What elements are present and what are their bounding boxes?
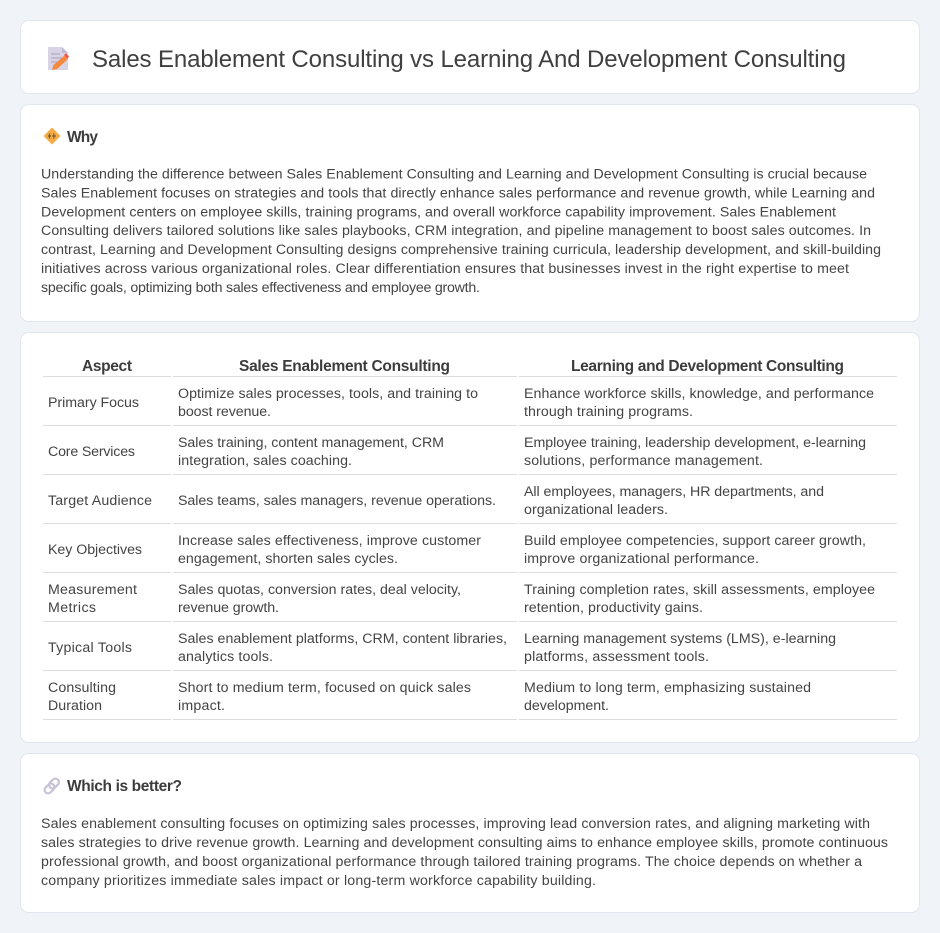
row: typical tools: Learning management systems (LMS), e-learning — [524, 631, 836, 647]
text block: which is better paragraph: company prioritizes immediate sales impact or long-term workforce capability building. — [41, 873, 596, 889]
icon: document with pencil — [48, 47, 69, 70]
heading: why: Why — [67, 129, 98, 146]
row: key objectives: Build employee competencies, support career growth, — [524, 533, 866, 549]
row: measurement metrics: retention, productivity gains. — [524, 600, 703, 616]
row: typical tools: platforms, assessment tools. — [524, 649, 709, 665]
row: core services: integration, sales coaching. — [178, 453, 352, 469]
text block: why paragraph: Understanding the difference between Sales Enablement Consulting and Learning and Development Consulting is crucial because — [41, 166, 867, 182]
row: measurement metrics: revenue growth. — [178, 600, 279, 616]
row: key objectives: engagement, shorten sales cycles. — [178, 551, 398, 567]
panel: which is better — [20, 754, 920, 912]
row: typical tools: Typical Tools — [48, 640, 132, 656]
row: primary focus: Primary Focus — [48, 395, 139, 411]
row: measurement metrics: Metrics — [48, 600, 96, 616]
row: target audience: Target Audience — [48, 493, 152, 509]
row: consulting duration — [48, 680, 811, 714]
row: primary focus — [48, 386, 874, 420]
row: consulting duration: development. — [524, 698, 609, 714]
row: typical tools — [48, 631, 836, 665]
title: Sales Enablement Consulting vs Learning And Development Consulting — [92, 46, 846, 73]
text block: which is better paragraph: professional growth, and boost organizational performance through tailored training programs. The choice depends on whether a — [41, 854, 862, 870]
icon: chain link — [43, 777, 60, 795]
text block: why paragraph: contrast, Learning and Development Consulting designs comprehensive training curricula, leadership development, and skill-building — [41, 242, 881, 258]
panel: why — [20, 104, 920, 322]
text block: which is better paragraph: sales strategies to drive revenue growth. Learning and development consulting aims to enhance employee skills, promote continuous — [41, 835, 888, 851]
row: target audience: All employees, managers, HR departments, and — [524, 484, 824, 500]
text block: which is better paragraph — [41, 816, 888, 889]
row: primary focus: Optimize sales processes, tools, and training to — [178, 386, 478, 402]
row: consulting duration: Short to medium term, focused on quick sales — [178, 680, 471, 696]
text block: why paragraph: Development centers on employee skills, training programs, and overall workforce capability improvement. Sales Enablement — [41, 204, 836, 220]
row: measurement metrics — [48, 582, 875, 616]
row: target audience: Sales teams, sales managers, revenue operations. — [178, 493, 496, 509]
table header row: Learning and Development Consulting — [571, 358, 844, 375]
text block: why paragraph — [41, 166, 881, 296]
panel: comparison table — [20, 332, 920, 742]
row: consulting duration: Consulting — [48, 680, 116, 696]
row: measurement metrics: Measurement — [48, 582, 137, 598]
row: key objectives: Increase sales effectiveness, improve customer — [178, 533, 481, 549]
panel: title header — [20, 20, 920, 94]
text block: why paragraph: Sales Enablement focuses on strategies and tools that directly enhance sales performance and revenue growth, while Learning and — [41, 185, 875, 201]
row: consulting duration: Duration — [48, 698, 102, 714]
row: typical tools: analytics tools. — [178, 649, 273, 665]
text block: why paragraph: specific goals, optimizing both sales effectiveness and employee growth. — [41, 280, 480, 296]
text block: why paragraph: initiatives across various organizational roles. Clear differentiation ensures that businesses invest in the right expertise to meet — [41, 261, 849, 277]
row: target audience — [48, 484, 824, 518]
icon: orange diamond — [44, 128, 60, 144]
row: key objectives — [48, 533, 866, 567]
table header row: Aspect — [82, 358, 132, 375]
row: key objectives: improve organizational performance. — [524, 551, 759, 567]
text block: why paragraph: Consulting delivers tailored solutions like sales playbooks, CRM integration, and pipeline management to boost sales outcomes. In — [41, 223, 871, 239]
row: core services: solutions, performance management. — [524, 453, 763, 469]
row: key objectives: Key Objectives — [48, 542, 142, 558]
row: consulting duration: impact. — [178, 698, 225, 714]
row: core services: Sales training, content management, CRM — [178, 435, 444, 451]
row: primary focus: through training programs. — [524, 404, 693, 420]
text block: which is better paragraph: Sales enablement consulting focuses on optimizing sales processes, improving lead conversion rates, and aligning marketing with — [41, 816, 870, 832]
table header row — [82, 358, 844, 375]
row: primary focus: Enhance workforce skills, knowledge, and performance — [524, 386, 874, 402]
heading: which is better: Which is better? — [67, 778, 182, 795]
row: consulting duration: Medium to long term, emphasizing sustained — [524, 680, 811, 696]
row: core services — [48, 435, 866, 469]
row: measurement metrics: Training completion rates, skill assessments, employee — [524, 582, 875, 598]
row: primary focus: boost revenue. — [178, 404, 271, 420]
table header row: Sales Enablement Consulting — [239, 358, 450, 375]
row: measurement metrics: Sales quotas, conversion rates, deal velocity, — [178, 582, 461, 598]
row: target audience: organizational leaders. — [524, 502, 668, 518]
row: core services: Core Services — [48, 444, 135, 460]
row: core services: Employee training, leadership development, e-learning — [524, 435, 866, 451]
row: typical tools: Sales enablement platforms, CRM, content libraries, — [178, 631, 507, 647]
